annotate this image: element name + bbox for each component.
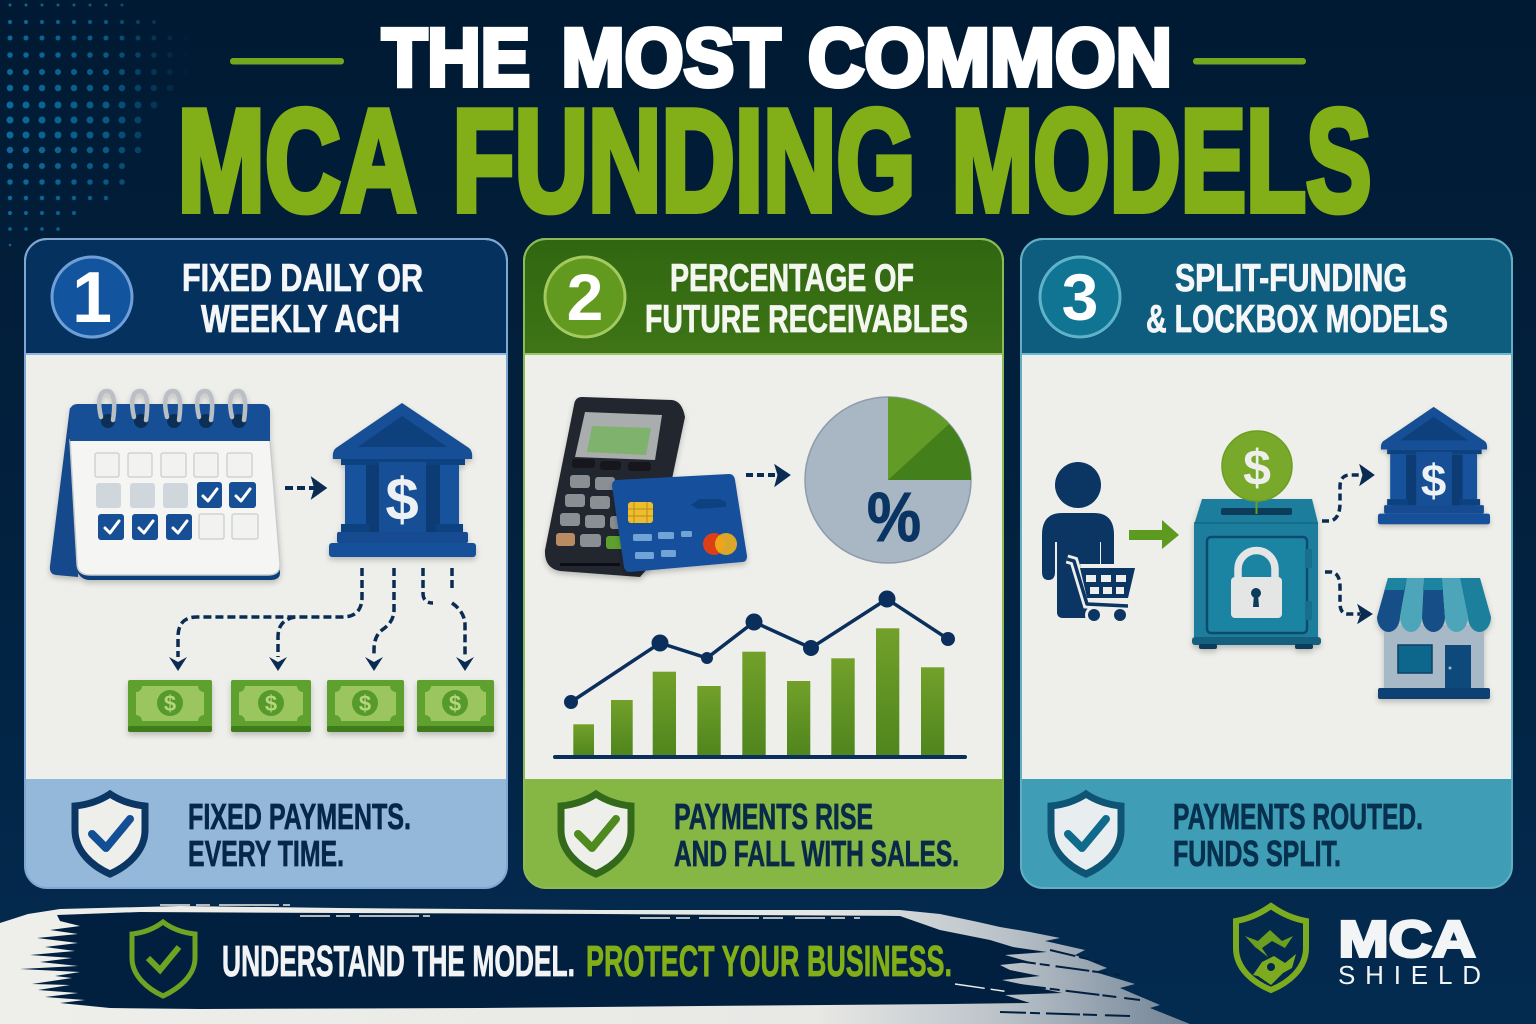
- banner tagline: PROTECT YOUR BUSINESS.: [586, 938, 952, 986]
- banner shield: [132, 922, 195, 996]
- panel 2 caption: PAYMENTS RISE: [674, 796, 873, 837]
- icon: lockbox safe: [1192, 499, 1321, 649]
- banner tagline: UNDERSTAND THE MODEL.: [222, 938, 575, 986]
- logo wordmark: SHIELD: [1338, 960, 1481, 990]
- icon: cash bills: $: [449, 691, 461, 716]
- bar and line chart: [553, 590, 967, 759]
- title line one: COMMON: [808, 12, 1172, 104]
- icon: bank 2: [1378, 407, 1490, 524]
- title rule right: [1193, 58, 1306, 64]
- panel 1 heading: WEEKLY ACH: [201, 298, 400, 341]
- icon: panel 3 shield: [1051, 794, 1121, 874]
- panel 2 number badge: 2: [567, 260, 603, 334]
- panel 2 number badge: [544, 257, 626, 339]
- panel 2 caption: AND FALL WITH SALES.: [674, 833, 959, 874]
- brush streak texture: [160, 905, 1140, 1016]
- arrow: shopper to lockbox: [1129, 520, 1179, 549]
- panel 2 body: [524, 350, 1003, 782]
- title line two: MCA: [178, 80, 416, 242]
- brush stroke banner: [0, 905, 1190, 1024]
- halftone dot pattern: [10, 5, 190, 245]
- panel 1 body: [25, 350, 507, 782]
- icon: panel 2 shield: [561, 794, 631, 874]
- title: [178, 12, 1372, 242]
- panel 1 heading: FIXED DAILY OR: [182, 257, 423, 300]
- MCA Shield logo: [1236, 906, 1481, 990]
- logo shield: [1236, 906, 1306, 990]
- panel 1 footer: [25, 779, 507, 888]
- title line one: MOST: [562, 12, 780, 104]
- panel 2 heading: FUTURE RECEIVABLES: [645, 298, 968, 341]
- panel 2 caption: [674, 796, 959, 874]
- arrow: lockbox to bank: [1322, 465, 1374, 521]
- title line two: [178, 80, 1372, 242]
- icon: card terminal: [545, 397, 685, 577]
- panel 3 caption: FUNDS SPLIT.: [1173, 833, 1341, 874]
- light brush background: [0, 906, 1190, 1024]
- icon: cash bills: [128, 680, 494, 732]
- panel 3 number badge: [1039, 257, 1121, 339]
- panel 3 header: [1021, 239, 1512, 354]
- panel 1 number badge: [51, 257, 133, 339]
- panel 1 caption: EVERY TIME.: [188, 833, 344, 874]
- panel 3 footer: [1021, 779, 1512, 888]
- icon: cash bills: $: [164, 691, 176, 716]
- panel 2 heading: PERCENTAGE OF: [670, 257, 914, 300]
- panel 1 heading: [182, 257, 423, 341]
- title rule left: [230, 58, 344, 64]
- panel 3 heading: SPLIT-FUNDING: [1175, 257, 1407, 300]
- icon: calendar: [50, 391, 280, 580]
- arrow: terminal to pie: [746, 465, 790, 486]
- panel 3 heading: [1146, 257, 1448, 341]
- icon: dollar coin: $: [1243, 440, 1271, 496]
- icon: cash bills: $: [359, 691, 371, 716]
- panel 3 caption: [1173, 796, 1423, 874]
- panel 2 heading: [645, 257, 968, 341]
- panel 1 caption: FIXED PAYMENTS.: [188, 796, 411, 837]
- icon: credit card: [612, 474, 747, 572]
- dark brush banner: [20, 912, 1062, 1009]
- title line two: FUNDING: [452, 80, 916, 242]
- pie chart: %: [867, 478, 921, 556]
- icon: bank: $: [385, 466, 419, 533]
- panel 3 body: [1021, 350, 1512, 782]
- title line one: THE: [382, 12, 530, 104]
- arrow: calendar to bank: [285, 478, 326, 498]
- icon: bank: [329, 403, 476, 557]
- dashed payout arrows: [169, 568, 474, 671]
- panel 1 header: [25, 239, 507, 354]
- panel 1 caption: [188, 796, 411, 874]
- arrow: lockbox to store: [1325, 572, 1372, 623]
- icon: shopper with cart: [1042, 462, 1140, 624]
- title line one: [382, 12, 1172, 104]
- icon: storefront: [1377, 578, 1491, 699]
- icon: bank 2: $: [1421, 455, 1446, 506]
- panel: fixed daily or weekly ACH: [25, 239, 507, 888]
- pie chart: [805, 397, 971, 563]
- panel 1 number badge: 1: [72, 258, 112, 338]
- icon: dollar coin: [1222, 431, 1292, 514]
- panel 2 footer: [524, 779, 1003, 888]
- panel 2 header: [524, 239, 1003, 354]
- icon: cash bills: $: [265, 691, 277, 716]
- panel: percentage of future receivables: [524, 239, 1003, 888]
- logo wordmark: MCA: [1338, 910, 1476, 968]
- logo wordmark: [1338, 910, 1481, 990]
- panel: split-funding and lockbox models: [1021, 239, 1512, 888]
- panel 3 caption: PAYMENTS ROUTED.: [1173, 796, 1423, 837]
- panel 3 number badge: 3: [1062, 260, 1098, 334]
- icon: panel 1 shield: [75, 794, 145, 874]
